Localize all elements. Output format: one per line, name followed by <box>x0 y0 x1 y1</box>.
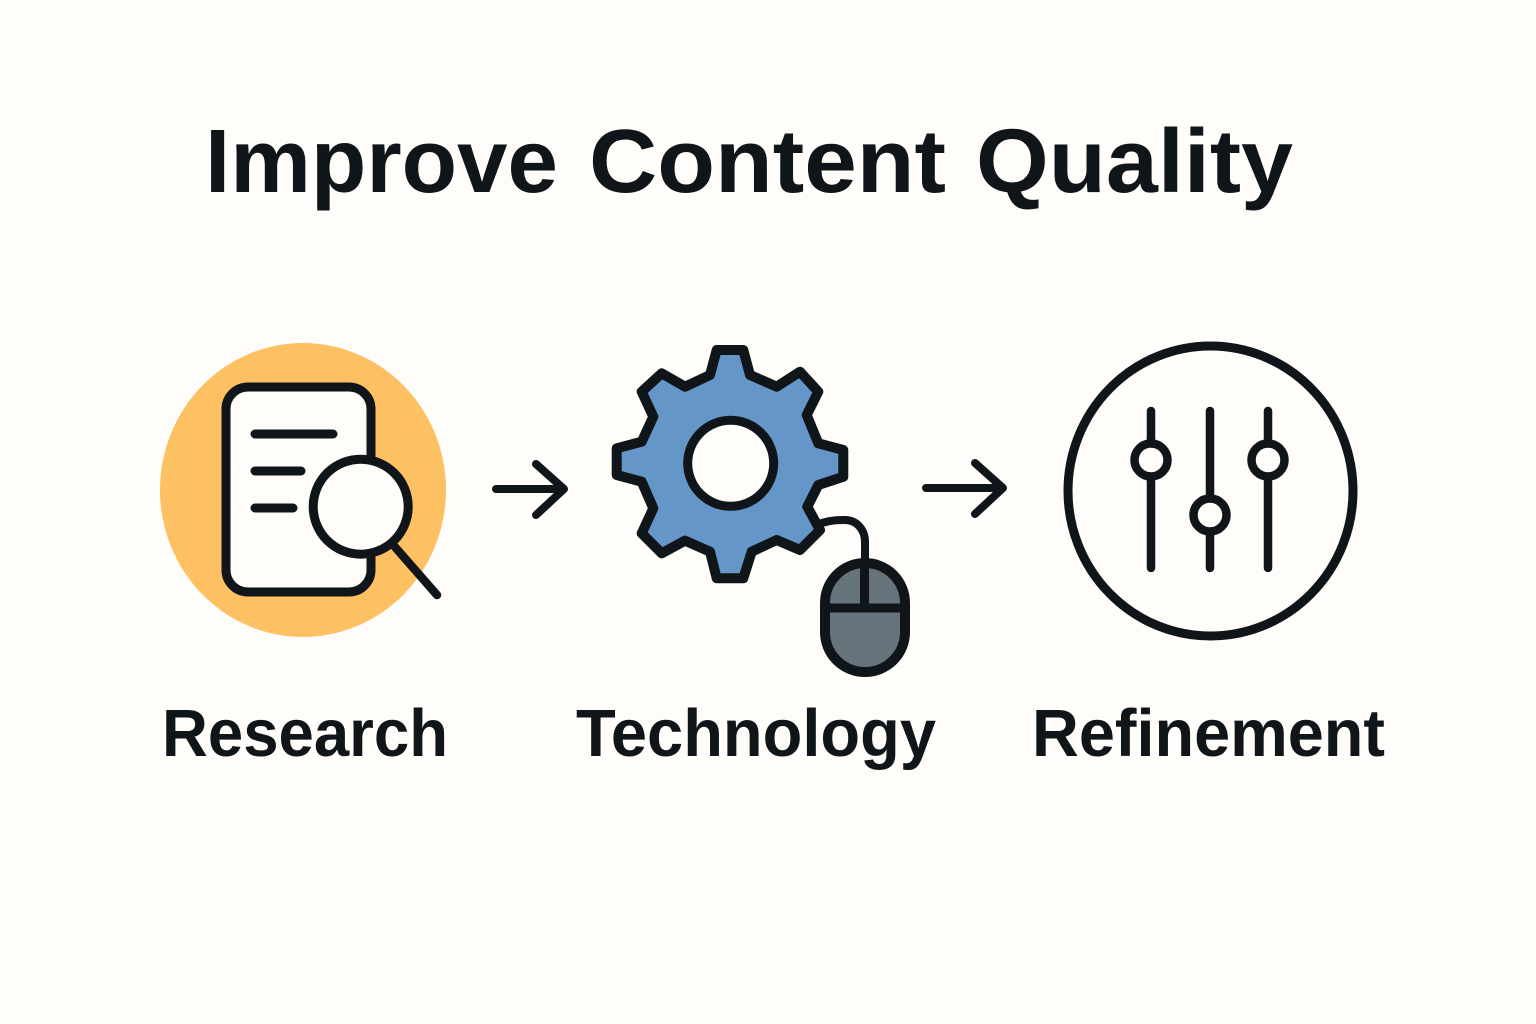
arrow: technology to refinement <box>926 463 1003 514</box>
title: Content <box>589 112 946 212</box>
label: research: Research <box>162 696 448 771</box>
title <box>205 112 1293 212</box>
title: Quality <box>976 112 1293 212</box>
icon: research document with magnifier <box>160 343 446 637</box>
icon: refinement sliders in circle <box>1068 346 1353 636</box>
label: refinement: Refinement <box>1032 696 1385 771</box>
label: technology: Technology <box>576 696 936 771</box>
arrow: research to technology <box>496 464 564 515</box>
icon: gear with mouse <box>617 350 905 672</box>
title: Improve <box>205 112 558 212</box>
